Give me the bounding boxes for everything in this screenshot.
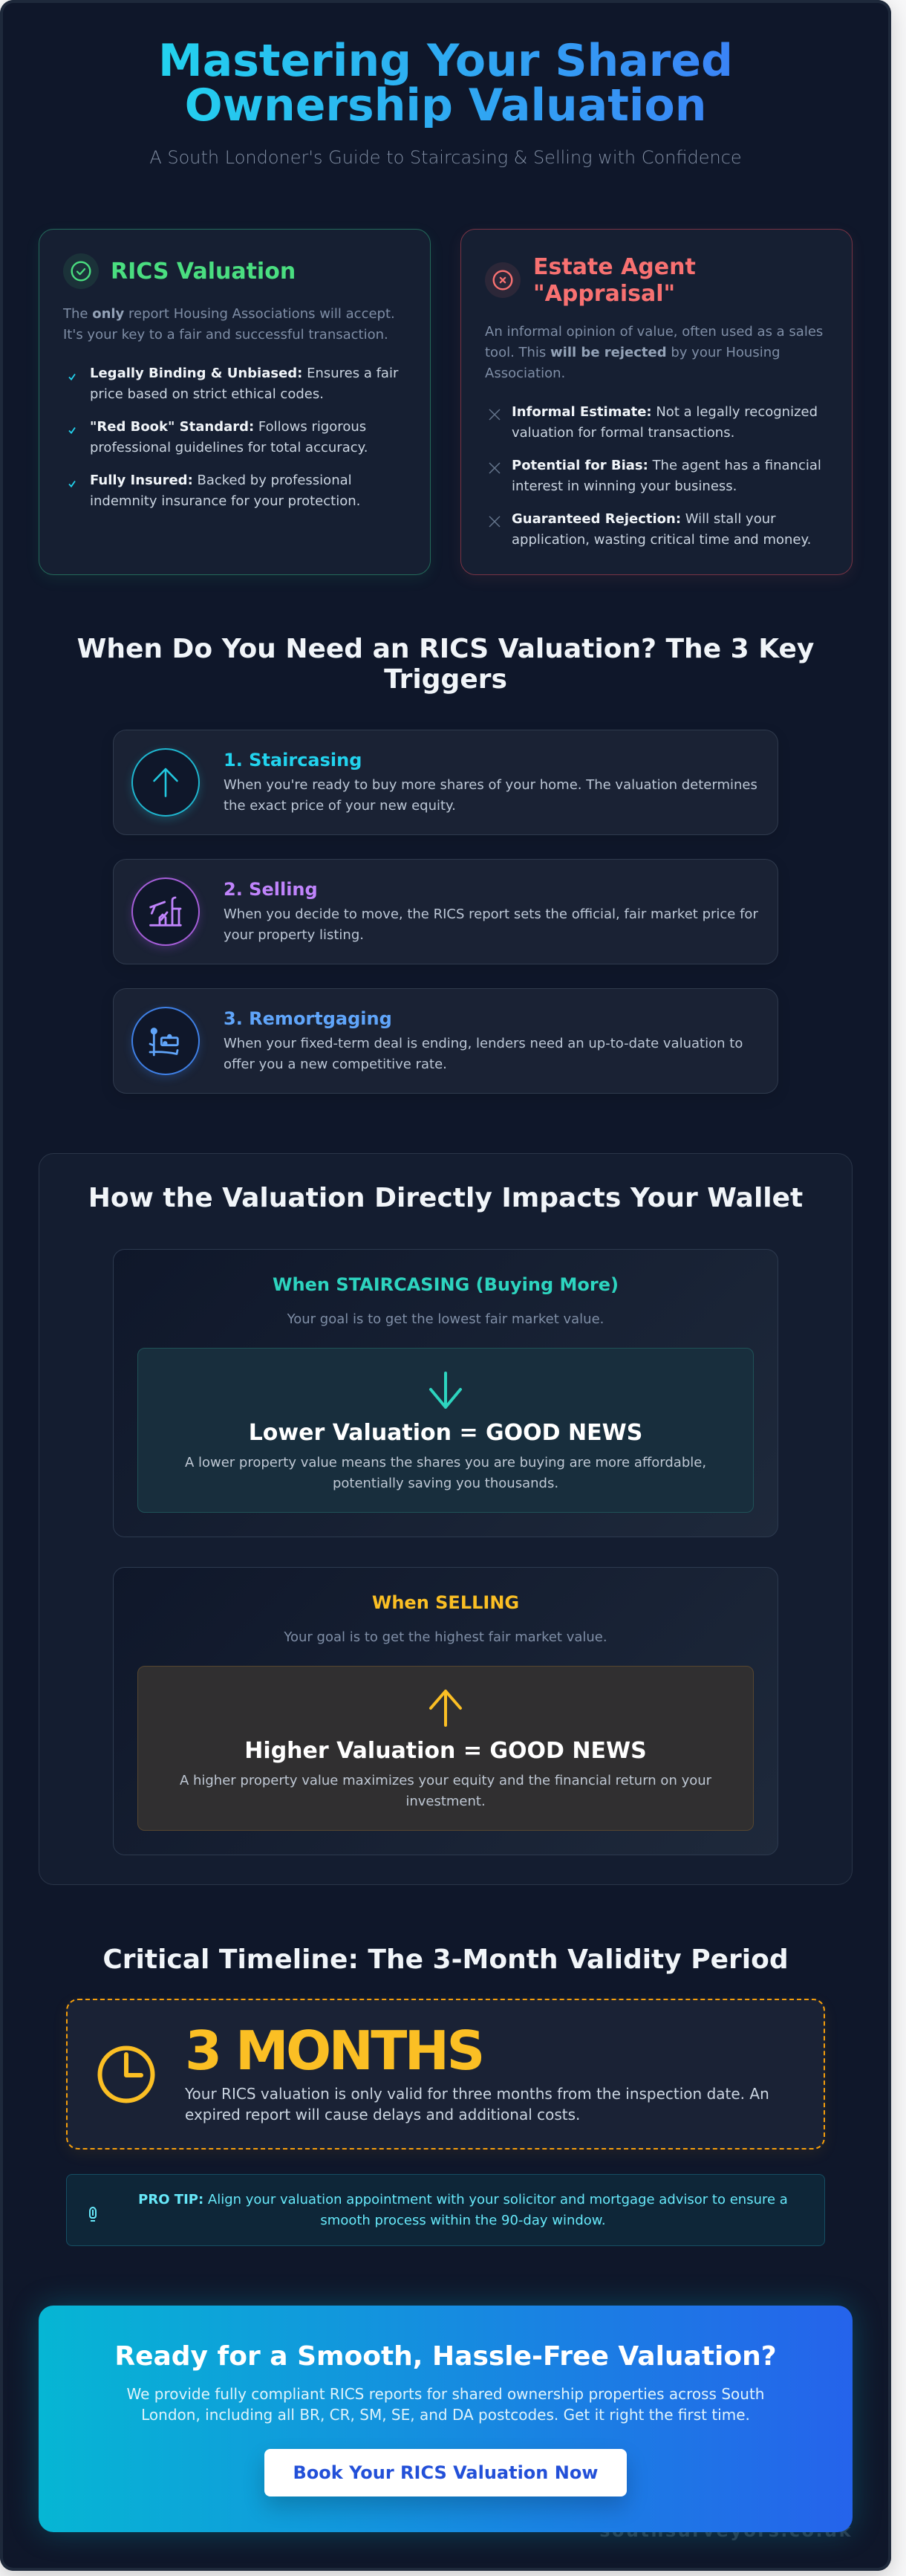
result heading: Higher Valuation = GOOD NEWS <box>244 1738 647 1764</box>
icon: bulb <box>89 2207 97 2222</box>
pro tip text: smooth process within the 90-day window. <box>320 2213 606 2228</box>
result text <box>180 1773 711 1809</box>
panel: step staircasing <box>113 730 778 835</box>
icon: clock <box>98 2046 154 2103</box>
icon: remortgage chart <box>131 1007 200 1075</box>
step heading: 1. Staircasing <box>224 750 362 770</box>
list item: red book: "Red Book" Standard: Follows rigorous <box>90 419 366 435</box>
CTA button: Book Your RICS Valuation Now <box>293 2462 598 2483</box>
icon: red cross circle <box>485 262 521 298</box>
CTA button <box>264 2449 627 2496</box>
panel: pro tip <box>66 2174 825 2246</box>
step description <box>224 906 758 943</box>
list item: red book <box>68 419 368 455</box>
heading: estate agent appraisal <box>533 254 696 306</box>
CTA text: We provide fully compliant RICS reports for shared ownership properties across South <box>127 2385 764 2403</box>
result text <box>185 1455 706 1491</box>
staircasing goal: Your goal is to get the lowest fair market value. <box>287 1311 604 1327</box>
list item: legally binding <box>68 366 398 402</box>
step description: When you're ready to buy more shares of your home. The valuation determines <box>224 777 757 793</box>
intro text: The only report Housing Associations will accept. <box>63 306 395 322</box>
list item: fully insured: Fully Insured: Backed by professional <box>90 473 352 488</box>
staircasing heading: When STAIRCASING (Buying More) <box>273 1274 619 1295</box>
step description: your property listing. <box>224 927 364 943</box>
watermark: southsurveyors.co.uk <box>599 2520 853 2541</box>
heading: timeline: Critical Timeline: The 3-Month Validity Period <box>102 1944 789 1975</box>
pro tip text: PRO TIP: Align your valuation appointment with your solicitor and mortgage advisor to ensure a <box>138 2192 788 2207</box>
intro text: An informal opinion of value, often used as a sales <box>485 324 823 340</box>
intro text <box>485 324 823 381</box>
icon: down arrow <box>429 1372 462 1409</box>
title: Mastering Your Shared <box>158 35 733 87</box>
step description: offer you a new competitive rate. <box>224 1057 447 1072</box>
heading: estate agent appraisal: Estate Agent <box>533 254 696 279</box>
list item: informal estimate <box>489 404 818 441</box>
list item: fully insured: indemnity insurance for your protection. <box>90 493 360 509</box>
panel: step remortgaging <box>113 988 778 1094</box>
panel: call to action <box>39 2306 853 2532</box>
heading: triggers <box>77 634 814 695</box>
list item: informal estimate: Informal Estimate: Not a legally recognized <box>512 404 818 420</box>
list item: legally binding: Legally Binding & Unbiased: Ensures a fair <box>90 366 398 381</box>
panel: wallet impact <box>39 1153 853 1885</box>
CTA text: London, including all BR, CR, SM, SE, and DA postcodes. Get it right the first time. <box>141 2406 750 2424</box>
intro text <box>62 306 395 343</box>
heading: RICS valuation: RICS Valuation <box>111 259 296 284</box>
panel: estate agent appraisal <box>460 229 853 575</box>
step description: When your fixed-term deal is ending, lenders need an up-to-date valuation to <box>224 1036 743 1051</box>
selling heading: When SELLING <box>372 1592 519 1613</box>
list item: fully insured <box>68 473 360 509</box>
result text: A lower property value means the shares you are buying are more affordable, <box>185 1455 706 1470</box>
result: higher valuation <box>137 1666 754 1831</box>
icon: selling chart <box>131 877 200 946</box>
icon: staircasing arrow <box>131 748 200 817</box>
intro text: It's your key to a fair and successful transaction. <box>63 327 388 343</box>
result text: potentially saving you thousands. <box>333 1476 558 1491</box>
step heading: 3. Remortgaging <box>224 1008 392 1029</box>
selling goal: Your goal is to get the highest fair market value. <box>284 1629 607 1645</box>
validity text <box>185 2085 769 2124</box>
heading: wallet impact: How the Valuation Directly Impacts Your Wallet <box>88 1183 803 1213</box>
CTA heading: Ready for a Smooth, Hassle-Free Valuation? <box>114 2340 777 2372</box>
sub-panel: staircasing <box>113 1249 778 1537</box>
panel: RICS valuation <box>39 229 431 575</box>
icon: green check circle <box>63 253 99 289</box>
heading: triggers: Triggers <box>384 664 507 695</box>
result text: A higher property value maximizes your equity and the financial return on your <box>180 1773 711 1788</box>
validity text: Your RICS valuation is only valid for three months from the inspection date. An <box>185 2085 769 2103</box>
list item: rejection: application, wasting critical time and money. <box>512 532 811 548</box>
intro text: tool. This will be rejected by your Housing <box>485 345 780 360</box>
title: Ownership Valuation <box>185 80 706 132</box>
result text: investment. <box>405 1794 486 1809</box>
heading: estate agent appraisal: "Appraisal" <box>533 281 675 306</box>
list item: bias <box>489 458 821 494</box>
subtitle: A South Londoner's Guide to Staircasing & Selling with Confidence <box>149 147 742 168</box>
list item: red book: professional guidelines for total accuracy. <box>90 440 368 455</box>
step heading: 2. Selling <box>224 879 318 900</box>
CTA text <box>127 2385 764 2424</box>
step description: When you decide to move, the RICS report sets the official, fair market price for <box>224 906 758 922</box>
list item: bias: interest in winning your business. <box>512 478 737 494</box>
heading: triggers: When Do You Need an RICS Valuation? The 3 Key <box>77 634 814 664</box>
step description <box>224 777 757 814</box>
panel: 3 months validity <box>66 1999 825 2150</box>
validity text: expired report will cause delays and additional costs. <box>185 2106 580 2124</box>
panel: step selling <box>113 859 778 964</box>
icon: up arrow <box>429 1690 462 1727</box>
step description <box>224 1036 743 1072</box>
title <box>0 39 891 128</box>
list item: informal estimate: valuation for formal transactions. <box>512 425 734 441</box>
list item: rejection: Guaranteed Rejection: Will stall your <box>512 511 776 527</box>
list item: rejection <box>489 511 811 548</box>
big number: 3 MONTHS <box>185 2019 483 2082</box>
list item: bias: Potential for Bias: The agent has a financial <box>512 458 821 473</box>
step description: the exact price of your new equity. <box>224 798 456 814</box>
sub-panel: selling <box>113 1567 778 1855</box>
list item: legally binding: price based on strict ethical codes. <box>90 386 324 402</box>
pro tip text <box>138 2192 788 2228</box>
intro text: Association. <box>485 366 565 381</box>
result heading: Lower Valuation = GOOD NEWS <box>249 1420 642 1446</box>
result: lower valuation <box>137 1348 754 1513</box>
